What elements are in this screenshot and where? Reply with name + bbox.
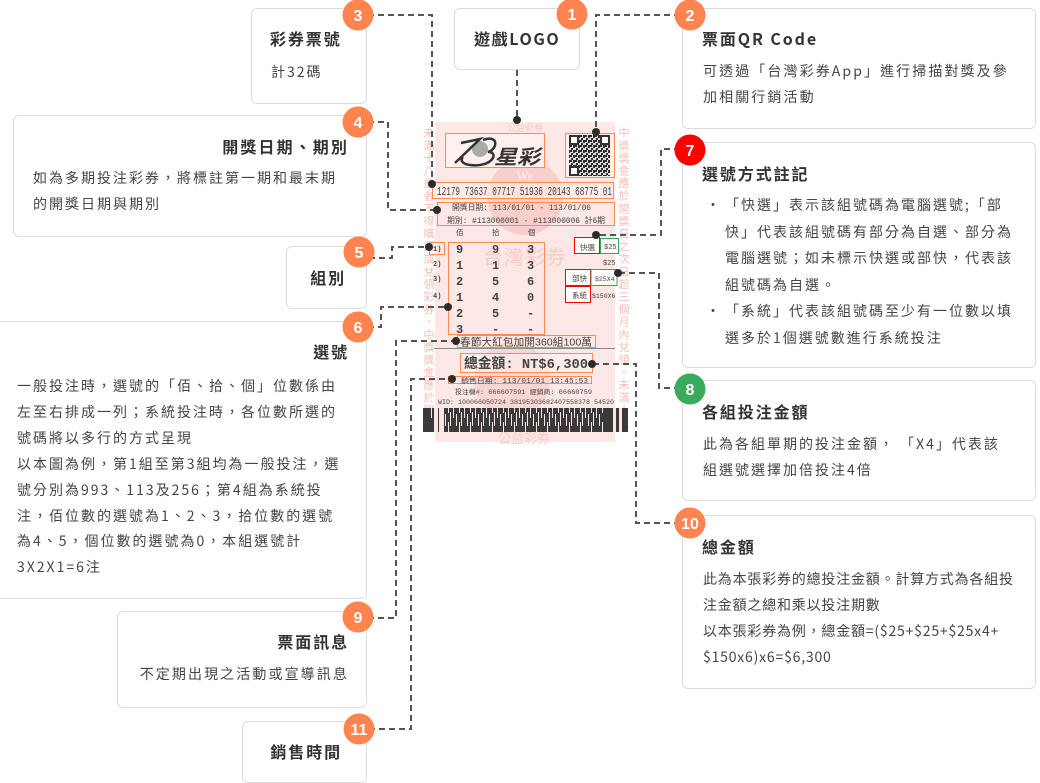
ticket selected numbers: 3 (527, 243, 534, 257)
connector: group (359, 247, 429, 258)
connector: bet amount (618, 273, 690, 388)
badge 11: 11 (351, 722, 368, 739)
panel: sale time (242, 721, 367, 783)
badge 7 (674, 134, 706, 166)
text: quick pick explanation: 組號碼為自選。 (725, 275, 837, 295)
text: quick pick explanation: 「快選」表示該組號碼為電腦選號;「部 (725, 195, 1003, 215)
heading: bet amount per group: 各組投注金額 (702, 399, 809, 423)
ticket event message: 春節大紅包加開360組100萬 (460, 336, 592, 348)
text: QR code: 可透過「台灣彩券App」進行掃描對獎及參 (703, 61, 1009, 81)
ticket side text (422, 127, 630, 429)
ticket selected numbers: 5 (492, 307, 499, 321)
ticket barcode (423, 408, 628, 432)
ticket serial number (432, 182, 614, 199)
ticket selection marks and amounts: 部快 (572, 273, 587, 283)
text: draw date and period (33, 168, 337, 214)
ticket sale time (448, 376, 592, 386)
ticket selected numbers: - (527, 323, 534, 337)
ticket terminal info: WID: 100066050724 38195303682407558378 54520 (438, 399, 614, 406)
ticket background: 公益彩券 (507, 121, 543, 134)
ticket terminal info: 投注機#: 666607591 經銷商: 66660759 (455, 387, 592, 396)
connector: sale time (359, 379, 452, 729)
ticket selected numbers: 6 (527, 275, 534, 289)
badge 10: 10 (681, 516, 699, 533)
ticket background: Care (515, 183, 535, 195)
ticket group labels: 2) (433, 261, 441, 269)
text: selected numbers: 號碼將以多行的方式呈現 (17, 428, 193, 448)
panel: game logo (454, 8, 580, 70)
text: selected numbers: 為4、5，個位數的選號為0，本組選號計 (17, 531, 302, 551)
heading: group: 組別 (310, 265, 346, 289)
ticket background: 公益彩券 (498, 428, 550, 447)
text: selected numbers (17, 376, 341, 577)
text: bet amount per group: 此為各組單期的投注金額， 「X4」代表該 (703, 434, 1000, 454)
text: ticket number: 計32碼 (271, 62, 323, 82)
ticket draw date (438, 202, 614, 226)
badge 8 (674, 374, 706, 404)
text: selected numbers: 左至右排成一列；系統投注時，各位數所選的 (17, 402, 337, 422)
text: selected numbers: 一般投注時，選號的「佰、拾、個」位數係由 (17, 376, 337, 396)
text: total amount: $150x6)x6=$6,300 (703, 647, 832, 667)
ticket game logo (446, 134, 544, 169)
text: quick pick explanation (725, 195, 1013, 348)
ticket selection marks and amounts: $150X6 (592, 293, 616, 300)
heading: ticket message: 票面訊息 (277, 629, 349, 653)
ticket selected numbers: - (492, 323, 499, 337)
badge 6 (342, 312, 374, 342)
ticket selection marks and amounts: $25X4 (595, 276, 615, 283)
text: total amount: 此為本張彩券的總投注金額。計算方式為各組投 (703, 569, 1014, 589)
badge 7: 7 (686, 143, 695, 160)
ticket selected numbers: 1 (492, 259, 499, 273)
connector end dots (425, 116, 622, 383)
heading: number selection notes: 選號方式註記 (702, 161, 809, 185)
text: total amount: 注金額之總和乘以投注期數 (703, 595, 881, 615)
badge 8: 8 (686, 382, 695, 399)
ticket (422, 121, 630, 447)
ticket selected numbers: 9 (456, 243, 463, 257)
text: quick pick explanation: 「系統」代表該組號碼至少有一位數以填 (725, 301, 1013, 321)
ticket game logo: 星彩 (494, 147, 543, 169)
ticket selection marks and amounts: $25 (604, 244, 617, 252)
ticket serial number: 12179 73637 07717 51936 20143 68775 01 (437, 185, 612, 199)
text: selected numbers: 號分別為993、113及256；第4組為系統投 (17, 480, 323, 500)
panel: number selection notes (682, 142, 1036, 368)
text: quick pick explanation: 電腦選號；如未標示快選或部快，代表該 (725, 248, 1013, 268)
connector: ticket number (358, 15, 432, 184)
ticket selected numbers: 2 (456, 275, 463, 289)
text: total amount: 以本張彩券為例，總金額=($25+$25+$25x4+ (703, 621, 999, 641)
ticket selected numbers: 9 (492, 243, 499, 257)
text: quick pick explanation: 快」代表該組號碼有部分為自選、部分為 (725, 222, 1013, 242)
ticket selected numbers: - (527, 307, 534, 321)
connector: ticket message (358, 341, 456, 618)
text: ticket message: 不定期出現之活動或宣導訊息 (140, 664, 349, 684)
ticket event message (434, 336, 615, 349)
panel: QR code (682, 8, 1036, 129)
badge 1: 1 (568, 7, 577, 24)
badge 4: 4 (354, 115, 363, 132)
badge 5 (344, 236, 374, 268)
ticket selection marks and amounts: 快選 (580, 242, 595, 252)
badge 4 (342, 106, 374, 138)
ticket selected numbers: 5 (492, 275, 499, 289)
ticket selection marks and amounts: 系統 (572, 290, 587, 300)
heading: total amount: 總金額 (702, 534, 756, 558)
badge 3: 3 (354, 8, 363, 25)
ticket selected numbers: 4 (492, 291, 499, 305)
panel: lottery ticket number (251, 8, 367, 104)
ticket draw date: 期別: #113000001 - #113000006 計6期 (447, 215, 605, 226)
text: number selection notes: ・ (706, 195, 722, 215)
ticket column labels: 個 (528, 227, 536, 237)
ticket total amount: 總金額: NT$6,300 (464, 355, 588, 373)
ticket terminal info (438, 387, 614, 406)
ticket column labels (456, 227, 536, 237)
connector: logo (516, 70, 518, 120)
badge 3 (342, 0, 374, 30)
badge 11 (344, 714, 374, 744)
ticket background: 台灣彩券 (483, 241, 567, 270)
ticket group labels: 4) (433, 293, 441, 301)
panel: draw date and period (13, 115, 367, 237)
connectors (358, 15, 690, 729)
text: QR code: 加相關行銷活動 (703, 87, 816, 107)
heading: ticket number: 彩券票號 (270, 26, 342, 50)
ticket selected numbers (448, 242, 544, 337)
text: selected numbers: 以本圖為例，第1組至第3組均為一般投注，選 (17, 454, 341, 474)
badge 10 (674, 508, 706, 538)
panel: bet amount per group (682, 380, 1036, 501)
text: bet amount per group (703, 434, 1000, 480)
heading: game logo: 遊戲LOGO (474, 26, 560, 50)
ticket selected numbers: 3 (527, 259, 534, 273)
ticket background (435, 121, 615, 447)
text: number selection notes (706, 195, 722, 321)
badge 5: 5 (355, 245, 364, 262)
text: bet amount per group: 組選號選擇加倍投注4倍 (703, 460, 873, 480)
connector: draw date (358, 122, 437, 210)
badge 9: 9 (354, 610, 363, 627)
ticket selected numbers: 0 (527, 291, 534, 305)
ticket selected numbers: 2 (456, 307, 463, 321)
panel: ticket message (117, 611, 367, 708)
ticket selection marks and amounts: $25 (603, 260, 616, 268)
ticket sale time: 銷售日期: 113/01/01 13:45:53 (461, 376, 588, 386)
text: total amount (703, 569, 1014, 667)
text: selected numbers: 注，佰位數的選號為1、2、3，拾位數的選號 (17, 506, 334, 526)
text: draw date and period: 如為多期投注彩券，將標註第一期和最末期 (33, 168, 337, 188)
ticket selected numbers: 3 (456, 323, 463, 337)
ticket side text: 未滿十八歲者不得購買或兌領彩券。中獎獎金應於開獎 (422, 127, 434, 429)
badge 6: 6 (354, 320, 363, 337)
ticket group labels: 3) (433, 276, 441, 284)
heading: selected numbers: 選號 (313, 339, 349, 363)
ticket group labels: 1) (433, 246, 441, 254)
panel: selected numbers (0, 321, 367, 599)
panel: group (286, 246, 367, 309)
ticket background: We (516, 168, 534, 183)
badge 9 (342, 602, 374, 632)
text: draw date and period: 的開獎日期與期別 (33, 194, 161, 214)
ticket QR code (566, 134, 614, 178)
ticket selection marks and amounts (566, 238, 618, 302)
ticket selected numbers: 1 (456, 291, 463, 305)
badge 2: 2 (686, 8, 695, 25)
connector: selection notes (596, 149, 690, 235)
heading: QR code: 票面QR Code (702, 26, 818, 50)
connector: QR code (596, 15, 690, 132)
ticket column labels: 拾 (492, 227, 500, 237)
text: selected numbers: 3X2X1=6注 (17, 557, 102, 577)
connector: total amount (592, 364, 690, 523)
text: QR code (703, 61, 1009, 107)
text: number selection notes: ・ (706, 301, 722, 321)
ticket side text: 中獎獎金應於開獎日之次日起三個月內兌領。未滿十八 (617, 127, 630, 429)
badge 2 (674, 0, 706, 30)
ticket group labels (430, 242, 444, 301)
connector: selected numbers (358, 307, 448, 327)
ticket selected numbers: 1 (456, 259, 463, 273)
text: quick pick explanation: 選多於1個選號數進行系統投注 (725, 328, 943, 348)
ticket draw date: 開獎日期: 113/01/01 - 113/01/06 (452, 202, 591, 213)
badge 1 (556, 0, 588, 30)
panel: total amount (682, 515, 1036, 689)
heading: sale time: 銷售時間 (270, 739, 342, 763)
heading: draw date and period: 開獎日期、期別 (222, 134, 349, 158)
ticket column labels: 佰 (456, 227, 464, 237)
